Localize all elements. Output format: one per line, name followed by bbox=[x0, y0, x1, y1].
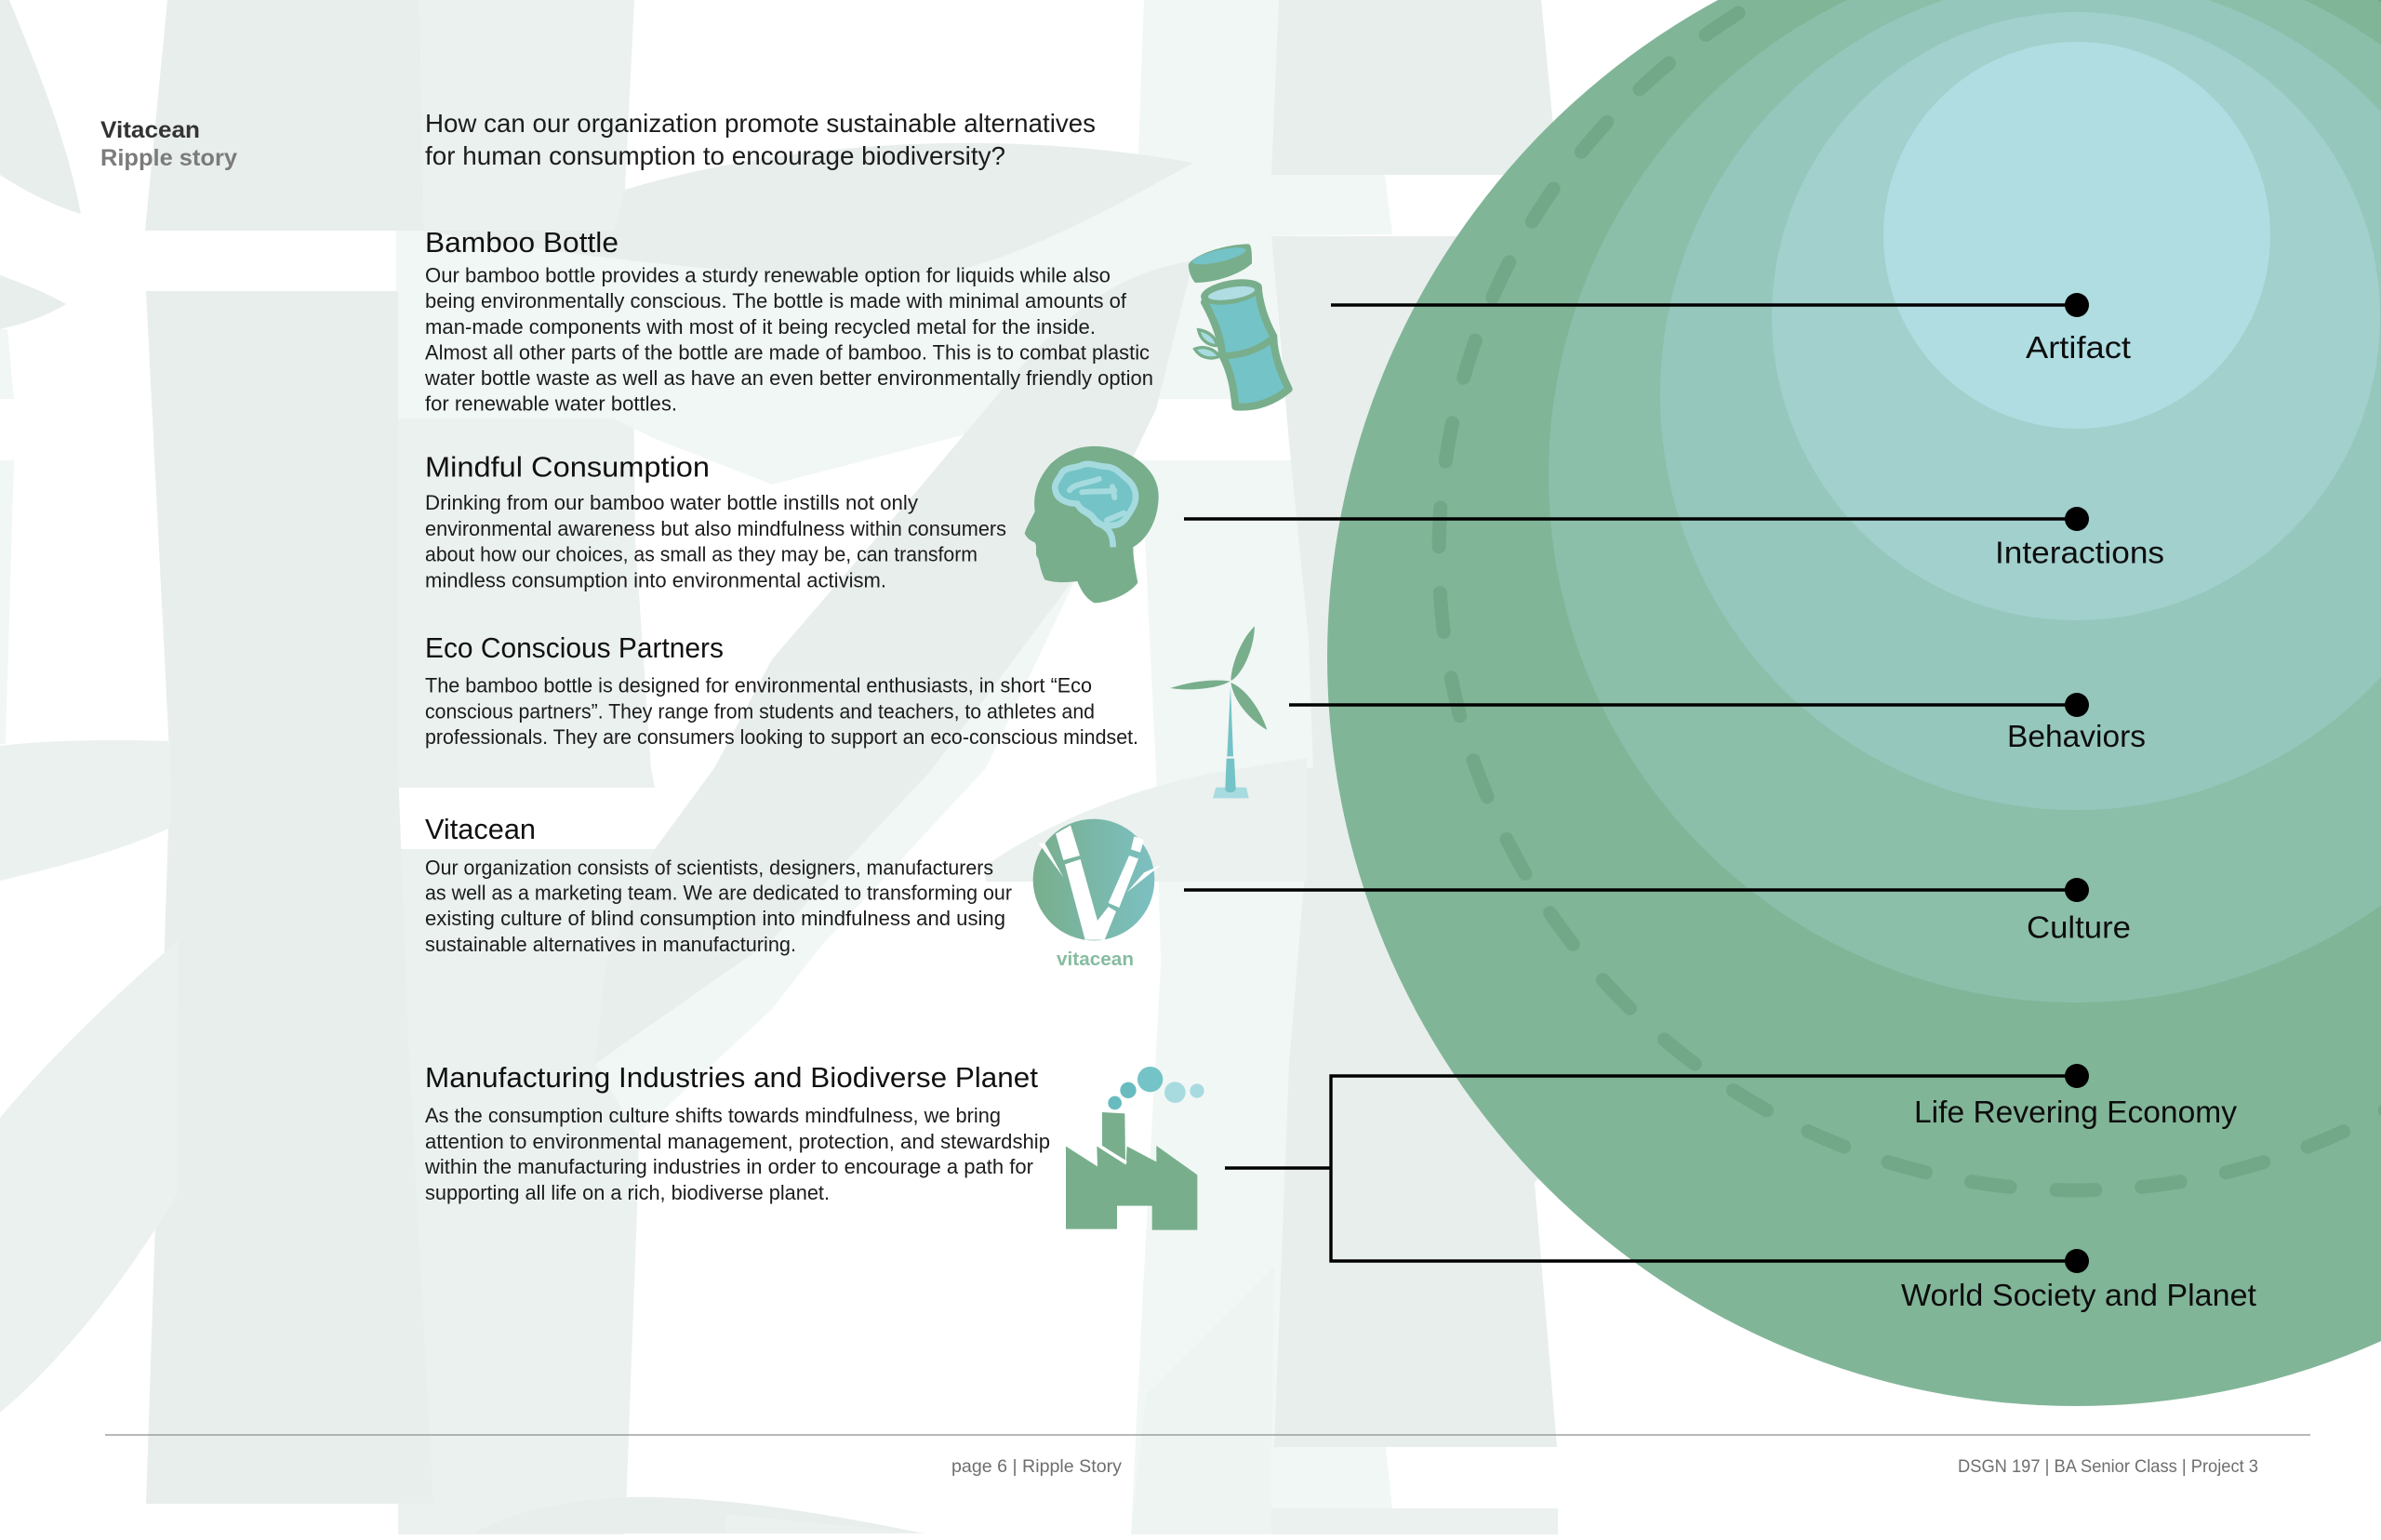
connector: Culture bbox=[1184, 878, 2089, 902]
icon: wind turbine bbox=[1170, 626, 1267, 798]
ripple diagram: concentric circles bbox=[1327, 0, 2381, 1406]
icon: vitacean logo wordmark: vitacean bbox=[1057, 949, 1134, 970]
connector: Interactions bbox=[1184, 507, 2089, 531]
text block: Bamboo Bottle: being environmentally conscious. The bottle is made with minimal amounts of bbox=[425, 289, 1127, 312]
header: brand: Ripple story bbox=[100, 145, 237, 171]
icon: vitacean logo bbox=[1033, 819, 1161, 940]
header: question bbox=[425, 109, 1096, 170]
header: question: How can our organization promote sustainable alternatives bbox=[425, 109, 1096, 138]
footer bbox=[105, 1435, 2310, 1477]
text block: Eco Conscious Partners: Eco Conscious Partners bbox=[425, 632, 724, 664]
ring labels bbox=[1901, 330, 2256, 1312]
text block: Mindful Consumption: Mindful Consumption bbox=[425, 452, 710, 484]
text block: Manufacturing Industries and Biodiverse Planet: As the consumption culture shifts towards mindfulness, we bring bbox=[425, 1104, 1001, 1127]
ring labels: Culture bbox=[2027, 909, 2131, 945]
text block: Bamboo Bottle: man-made components with most of it being recycled metal for the inside. bbox=[425, 315, 1096, 339]
text block: Manufacturing Industries and Biodiverse Planet: attention to environmental management, protection, and stewardship bbox=[425, 1130, 1050, 1153]
text block: Manufacturing Industries and Biodiverse Planet: within the manufacturing industries in order to encourage a path for bbox=[424, 1155, 1033, 1178]
text block: Eco Conscious Partners: conscious partners”. They range from students and teachers, to athletes and bbox=[425, 699, 1095, 723]
connector: Artifact bbox=[1331, 293, 2089, 317]
text block: Bamboo Bottle: water bottle waste as well as have an even better environmentally friendly option bbox=[424, 366, 1153, 390]
text block: Eco Conscious Partners: The bamboo bottle is designed for environmental enthusiasts, in short “Eco bbox=[425, 673, 1092, 697]
text block: Manufacturing Industries and Biodiverse Planet: supporting all life on a rich, biodiverse planet. bbox=[425, 1181, 830, 1204]
footer: page 6 | Ripple Story bbox=[951, 1456, 1122, 1477]
header: brand: Vitacean bbox=[100, 117, 200, 143]
text block: Vitacean: as well as a marketing team. We are dedicated to transforming our bbox=[425, 881, 1012, 904]
text block: Bamboo Bottle: Our bamboo bottle provides a sturdy renewable option for liquids while also bbox=[425, 264, 1111, 286]
icon: factory bbox=[1066, 1067, 1204, 1230]
dashed ripple ring bbox=[1439, 0, 2381, 1190]
text block: Manufacturing Industries and Biodiverse Planet: Manufacturing Industries and Biodiverse Planet bbox=[425, 1062, 1039, 1094]
text block: Eco Conscious Partners bbox=[425, 632, 1138, 749]
text block: Vitacean bbox=[425, 814, 1012, 956]
text block: Vitacean: Vitacean bbox=[425, 814, 536, 845]
connector: branch to economy and planet bbox=[1225, 1064, 2089, 1273]
text block: Manufacturing Industries and Biodiverse Planet bbox=[424, 1062, 1050, 1204]
text block: Vitacean: existing culture of blind consumption into mindfulness and using bbox=[425, 907, 1005, 930]
icon: head with brain bbox=[1025, 446, 1159, 603]
connector: Behaviors bbox=[1289, 693, 2089, 717]
text block: Mindful Consumption: Drinking from our bamboo water bottle instills not only bbox=[425, 491, 919, 514]
text block: Mindful Consumption: mindless consumption into environmental activism. bbox=[425, 569, 886, 591]
text block: Bamboo Bottle: Almost all other parts of the bottle are made of bamboo. This is to combat plastic bbox=[425, 340, 1150, 365]
text block: Mindful Consumption bbox=[425, 452, 1006, 591]
text block: Bamboo Bottle bbox=[424, 227, 1153, 415]
header: brand bbox=[100, 117, 237, 171]
ring labels: Artifact bbox=[2026, 330, 2131, 365]
text block: Bamboo Bottle: for renewable water bottles. bbox=[425, 392, 677, 415]
text block: Vitacean: sustainable alternatives in manufacturing. bbox=[425, 933, 796, 956]
text block: Eco Conscious Partners: professionals. They are consumers looking to support an eco-conscious mindset. bbox=[425, 725, 1138, 749]
text block: Mindful Consumption: about how our choices, as small as they may be, can transform bbox=[425, 543, 978, 565]
ring labels: World Society and Planet bbox=[1901, 1278, 2256, 1312]
text block: Bamboo Bottle: Bamboo Bottle bbox=[425, 227, 619, 259]
ring labels: Interactions bbox=[1995, 536, 2164, 569]
icon: bamboo bottle bbox=[1189, 244, 1289, 407]
footer: DSGN 197 | BA Senior Class | Project 3 bbox=[1958, 1456, 2258, 1477]
text block: Mindful Consumption: environmental awareness but also mindfulness within consumers bbox=[425, 517, 1006, 540]
ring labels: Life Revering Economy bbox=[1914, 1095, 2238, 1129]
text block: Vitacean: Our organization consists of scientists, designers, manufacturers bbox=[425, 856, 993, 879]
ring labels: Behaviors bbox=[2007, 719, 2146, 753]
header: question: for human consumption to encourage biodiversity? bbox=[425, 141, 1005, 170]
